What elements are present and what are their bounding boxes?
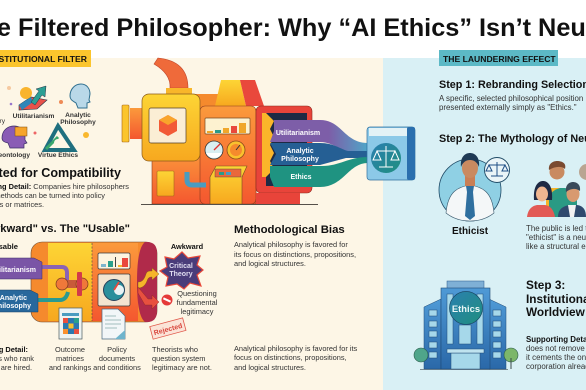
gauge window [205, 118, 250, 134]
text: methodological bias repeat: Analytical philosophy is favored for its [234, 344, 358, 353]
filter diagram [0, 242, 159, 339]
icon group: philosophies [0, 84, 96, 159]
text: methodological bias repeat: and logical structures. [234, 363, 306, 372]
text: step 1: presented externally simply as "Ethics." [439, 103, 577, 112]
icon: matrix document [59, 308, 82, 339]
icon: critical theory star: Theory [169, 271, 193, 278]
blue pipe [187, 172, 206, 185]
ethics badge: Ethics [452, 303, 480, 314]
band blue analytic: Philosophy [281, 156, 319, 163]
control box [210, 166, 247, 204]
caption: theorists: legitimacy are not. [152, 363, 212, 372]
stamp: rejected [150, 318, 186, 339]
band purple utilitarianism [270, 120, 368, 157]
ground line [141, 204, 318, 205]
band: analytic philosophy: Analytic [0, 295, 27, 302]
caption: policy documents: Policy [107, 345, 127, 354]
caption: theorists: question system [152, 354, 205, 363]
caption: outcome matrices: Outcome [55, 345, 85, 354]
icon: critical theory star [160, 252, 203, 289]
text: questioning legitimacy: legitimacy [181, 307, 214, 316]
caption: theorists: Theorists who [152, 345, 198, 354]
label: analytic philosophy: Analytic [65, 112, 91, 119]
icon: policy document [102, 309, 125, 339]
label: analytic philosophy: Philosophy [60, 119, 96, 126]
left panel background [0, 58, 383, 390]
top cones [215, 80, 264, 106]
label: ethicist: Ethicist [452, 226, 489, 237]
text: methodological bias: Analytical philosophy is favored for [234, 240, 348, 249]
filter body [31, 242, 157, 322]
label: virtue ethics: Virtue Ethics [38, 152, 78, 159]
label: utilitarianism: Utilitarianism [13, 113, 55, 120]
right panel background [383, 58, 586, 390]
body orange [152, 150, 256, 204]
connector pipes [38, 267, 88, 300]
band blue analytic [270, 143, 368, 165]
icon: critical theory star: Critical [169, 263, 193, 270]
arrow: red [138, 287, 159, 309]
left flange pipe [122, 105, 143, 142]
icon: ethics book [367, 127, 415, 180]
tag: institutional filter [0, 50, 91, 67]
text: methodological bias: and logical structures. [234, 259, 306, 268]
gauge panel [98, 274, 130, 306]
icon: analytic head [70, 84, 90, 108]
ground [420, 369, 508, 370]
band: analytic philosophy [0, 290, 38, 312]
arrow: yellow [138, 268, 159, 288]
heading: step 1: Step 1: Rebranding Selection [439, 79, 586, 91]
text: methodological bias repeat: focus on distinctions, propositions, [234, 353, 347, 362]
text: questioning legitimacy: Questioning [177, 289, 217, 298]
icon: virtue triangle [45, 126, 74, 150]
text: questioning legitimacy: fundamental [177, 298, 218, 307]
heading: step 3: Worldview [526, 305, 586, 319]
speech bubble: scales [484, 158, 510, 182]
icon: deontology [2, 126, 27, 148]
tag: laundering effect: THE LAUNDERING EFFECT [443, 54, 556, 64]
caption: policy documents: documents [99, 354, 135, 363]
band blue analytic: Analytic [286, 148, 314, 155]
band: utilitarianism [0, 258, 42, 279]
icon: utilitarianism [19, 86, 47, 110]
label: awkward: Awkward [171, 242, 204, 251]
icon: prohibited [162, 294, 172, 306]
caption: outcome matrices: matrices [56, 354, 84, 363]
exit frame [256, 106, 312, 193]
door [157, 171, 174, 196]
tag: laundering effect [439, 50, 558, 66]
band purple utilitarianism: Utilitarianism [276, 130, 320, 137]
icon: people group [527, 161, 586, 217]
caption: outcome matrices: and rankings [49, 363, 91, 372]
gauges [205, 141, 245, 159]
trees [414, 348, 518, 369]
main machine illustration [122, 58, 415, 205]
heading: step 3: Step 3: [526, 278, 565, 292]
text: methodological bias: its focus on distinctions, propositions, [234, 250, 356, 259]
yellow box [142, 94, 200, 161]
mini chart [98, 253, 130, 269]
caption: policy documents: and conditions [93, 363, 141, 372]
band teal ethics [270, 157, 368, 187]
icon: ethicist [439, 153, 510, 221]
band teal ethics: Ethics [290, 174, 312, 181]
stamp: rejected: Rejected [153, 323, 183, 337]
heading: methodological bias: Methodological Bias [234, 224, 345, 236]
decorative dots [7, 86, 89, 138]
icon: ethics building [414, 281, 518, 370]
top pipe [154, 58, 188, 88]
